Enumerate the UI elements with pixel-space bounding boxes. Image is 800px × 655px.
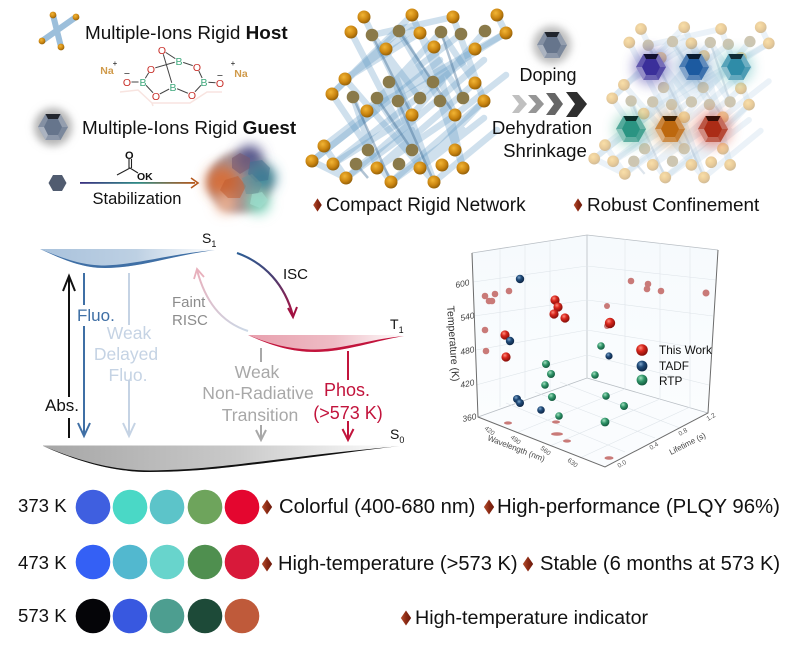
level: S1: S	[202, 230, 211, 246]
arrow: weak delayed fluorescence: Delayed	[94, 344, 158, 364]
arrow: phosphorescence: (>573 K)	[313, 403, 383, 423]
wall and floor projections	[482, 278, 710, 460]
icon: borate molecule	[100, 45, 248, 106]
level: S0	[43, 426, 404, 472]
label: dehydration shrinkage	[492, 117, 592, 161]
icon: borate molecule: B	[139, 77, 147, 89]
row: 473 K samples: 473 K	[18, 552, 67, 573]
icon: borate molecule: B	[200, 77, 208, 89]
data spheres: RTP	[541, 342, 628, 426]
icon: small grey hexagon	[48, 175, 66, 191]
icon: borate molecule: +	[231, 59, 236, 68]
row: 373 K samples	[18, 490, 259, 524]
arrow: ISC: ISC	[283, 266, 308, 283]
axis: temperature: 540	[459, 310, 476, 323]
level: S1	[40, 230, 216, 268]
icon: borate molecule: O	[147, 64, 155, 76]
legend: This Work	[659, 343, 712, 357]
icon: borate molecule: −	[217, 70, 223, 82]
label: dehydration shrinkage: Dehydration	[492, 117, 592, 138]
icon: guest gem with grey halo	[34, 108, 72, 146]
icon: borate molecule: +	[113, 59, 118, 68]
heading: guest: Multiple-Ions Rigid Guest	[82, 118, 297, 139]
chart: confined lattice with doped gems	[588, 21, 775, 183]
level: S0: S	[390, 426, 399, 442]
legend: TADF	[659, 359, 689, 373]
icon: potassium acetate structure: O	[125, 150, 134, 162]
axis: temperature: 600	[454, 277, 471, 290]
callout: robust confinement: Robust Confinement	[587, 195, 760, 216]
axis: wavelength: 420	[483, 425, 496, 437]
callout: colorful: Colorful (400-680 nm)	[279, 496, 475, 518]
axis: lifetime: 0.8	[678, 427, 689, 438]
axis: lifetime: Lifetime (s)	[668, 431, 707, 457]
arrow: weak delayed fluorescence: Weak	[107, 323, 151, 343]
icon: borate molecule: B	[169, 82, 177, 94]
arrow: ISC	[237, 253, 308, 317]
icon: borate molecule: O	[152, 91, 160, 103]
row: 373 K samples: 373 K	[18, 495, 67, 516]
arrow: weak non-radiative transition	[202, 348, 314, 440]
icon: borate molecule: O	[193, 62, 201, 74]
row: 473 K samples	[18, 545, 259, 579]
axis: temperature	[444, 277, 478, 424]
arrow: chevrons	[512, 92, 587, 117]
icon: potassium acetate structure: OK	[137, 171, 153, 183]
axis: temperature: 420	[459, 377, 476, 390]
icon: borate molecule: O	[216, 78, 224, 90]
axis: wavelength: 560	[539, 445, 552, 457]
callout: high-temperature: High-temperature (>573 K)	[278, 553, 518, 575]
axis: wavelength: 630	[566, 457, 579, 469]
axis: lifetime	[616, 412, 717, 470]
axis: wavelength: Wavelength (nm)	[486, 433, 546, 464]
icon: potassium acetate structure	[117, 150, 153, 183]
label: dehydration shrinkage: Shrinkage	[503, 140, 587, 161]
arrow: phosphorescence	[313, 351, 383, 440]
level: S0: 0	[399, 435, 404, 445]
icon: borate molecule: −	[124, 68, 130, 80]
callout: high-performance: High-performance (PLQY 96%)	[497, 496, 780, 518]
callout: compact rigid network: Compact Rigid Network	[326, 195, 526, 216]
arrow: weak delayed fluorescence	[94, 273, 158, 436]
axis: wavelength	[483, 425, 579, 469]
row: 573 K samples	[18, 599, 259, 633]
axis: temperature: 360	[461, 411, 478, 424]
legend	[636, 343, 712, 388]
axis: lifetime: 0.0	[616, 459, 628, 470]
icon: borate molecule: Na	[100, 65, 114, 77]
icon: borate molecule: B	[175, 56, 183, 68]
arrow: phosphorescence: Phos.	[324, 380, 370, 400]
axis: lifetime: 0.4	[648, 441, 660, 452]
axis: wavelength: 490	[509, 434, 522, 446]
icon: borate molecule: O	[123, 77, 131, 89]
icon: doping gem	[533, 26, 571, 64]
arrow: weak non-radiative transition: Non-Radiative	[202, 383, 314, 403]
icon: borate molecule: O	[158, 45, 166, 57]
arrow: absorption: Abs.	[45, 396, 79, 415]
chart: 3D scatter temperature vs wavelength vs lifetime	[444, 235, 718, 470]
icon: colored guest cluster	[206, 145, 276, 214]
callout: high-temperature indicator: High-temperature indicator	[415, 607, 649, 629]
axis: temperature: 480	[459, 344, 476, 357]
level: T1: T	[390, 316, 399, 332]
diagram: energy levels	[40, 230, 404, 472]
axis: lifetime: 1.2	[706, 412, 717, 423]
axis: temperature: Temperature (K)	[444, 305, 461, 382]
heading: host: Multiple-Ions Rigid Host	[85, 23, 288, 44]
chart: compact rigid network lattice	[306, 8, 512, 188]
label: stabilization: Stabilization	[92, 190, 181, 208]
arrow: weak non-radiative transition: Transition	[222, 405, 298, 425]
icon: borate molecule: O	[188, 90, 196, 102]
arrow: absorption	[45, 276, 79, 438]
arrow: fluorescence	[77, 273, 115, 436]
callout: stable: Stable (6 months at 573 K)	[540, 553, 780, 575]
arrow: stabilization	[80, 178, 198, 188]
arrow: fluorescence: Fluo.	[77, 306, 115, 325]
arrow: faint RISC: RISC	[172, 312, 208, 329]
level: T1	[248, 316, 404, 352]
arrow: weak delayed fluorescence: Fluo.	[109, 365, 147, 385]
level: S1: 1	[211, 239, 216, 249]
icon: multiple-ions rigid host cross	[39, 12, 79, 50]
data spheres: this work	[500, 295, 615, 362]
row: 573 K samples: 573 K	[18, 605, 67, 626]
level: T1: 1	[399, 325, 404, 335]
chart walls and floor	[472, 235, 718, 467]
arrow: faint RISC	[172, 269, 248, 331]
arrow: faint RISC: Faint	[172, 294, 206, 311]
arrow: weak non-radiative transition: Weak	[235, 362, 280, 382]
label: doping: Doping	[519, 65, 577, 85]
icon: borate molecule: Na	[234, 68, 248, 80]
legend: RTP	[659, 374, 683, 388]
data spheres: TADF	[506, 275, 613, 414]
